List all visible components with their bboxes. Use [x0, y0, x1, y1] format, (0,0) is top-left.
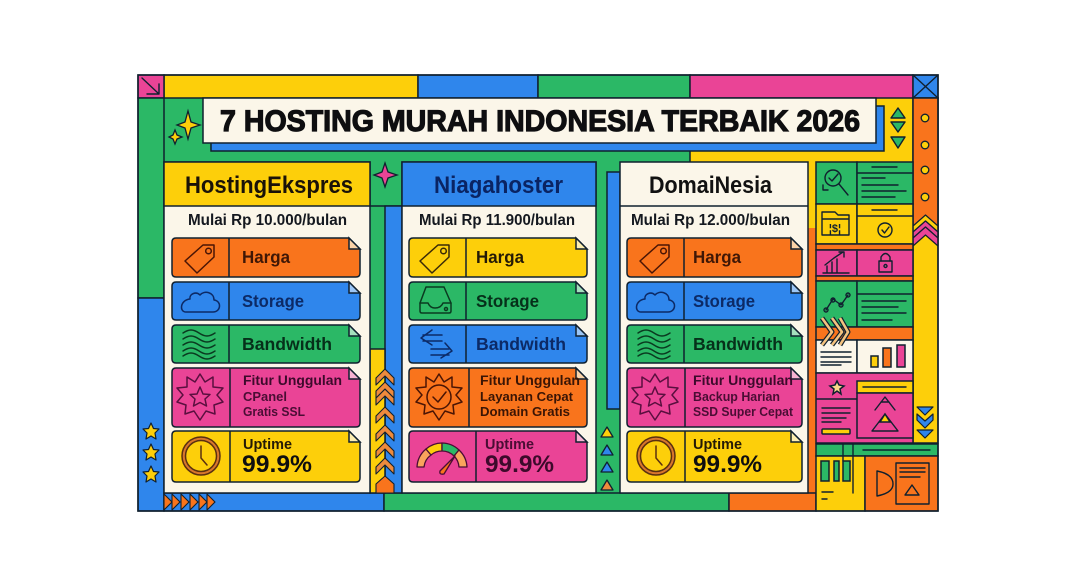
poster background — [138, 75, 938, 511]
icon: tag — [420, 245, 449, 273]
icon: waves — [183, 330, 215, 359]
row: Uptime: Uptime — [485, 437, 534, 453]
corner tile: blue cross — [913, 75, 938, 98]
row: Fitur Unggulan — [409, 368, 587, 427]
left border column — [138, 98, 164, 511]
tile row: chart and lock — [816, 250, 913, 276]
header: Niagahoster — [434, 172, 563, 199]
orange chevrons — [376, 369, 394, 493]
icon: check badge — [416, 374, 462, 420]
price: Mulai Rp 10.000/bulan — [188, 212, 347, 229]
strip with bars — [816, 444, 938, 456]
row: Harga: Harga — [693, 247, 741, 267]
tile row: line chart and text — [816, 281, 913, 327]
icon: transfer arrows — [421, 330, 452, 358]
row: Fitur Unggulan: Fitur Unggulan — [243, 372, 342, 388]
top border band — [164, 75, 913, 98]
row: Fitur Unggulan: Fitur Unggulan — [480, 372, 580, 388]
icon: star badge — [632, 374, 678, 420]
row: Bandwidth — [172, 325, 360, 363]
header: DomaiNesia — [649, 172, 773, 199]
gutter between columns 2 and 3 — [601, 172, 620, 490]
row: Uptime — [172, 431, 360, 482]
chevrons up — [913, 215, 938, 246]
arrows on bottom band — [164, 494, 215, 510]
tile row: search and text — [816, 162, 913, 204]
row: Fitur Unggulan: Domain Gratis — [480, 404, 570, 419]
row: Bandwidth: Bandwidth — [476, 334, 566, 354]
row: Uptime — [627, 431, 802, 482]
price: Mulai Rp 12.000/bulan — [631, 212, 790, 229]
row: Storage: Storage — [693, 291, 755, 311]
row: Fitur Unggulan: Gratis SSL — [243, 404, 305, 419]
row: Storage: Storage — [242, 291, 304, 311]
row: Uptime: 99.9% — [485, 451, 554, 478]
panel: HostingEkspres — [164, 162, 370, 493]
decorative tile panel — [816, 162, 938, 511]
gutter between columns 1 and 2 — [370, 206, 402, 493]
strip — [816, 276, 913, 281]
strip — [816, 244, 913, 250]
row: Harga: Harga — [242, 247, 290, 267]
row: Fitur Unggulan — [172, 368, 360, 427]
title banner — [203, 98, 884, 151]
row: Fitur Unggulan: Fitur Unggulan — [693, 372, 793, 388]
panel: Niagahoster — [402, 162, 596, 493]
chevrons overlapping tiles — [822, 318, 848, 345]
icon: cloud — [636, 292, 675, 312]
row: Fitur Unggulan: CPanel — [243, 389, 287, 404]
tile row: text and bars — [816, 340, 913, 373]
pink sparkle — [374, 163, 397, 187]
row: Fitur Unggulan: Layanan Cepat — [480, 389, 574, 404]
icon: tag — [185, 245, 214, 273]
right border column — [913, 98, 938, 443]
row: Fitur Unggulan: Backup Harian — [693, 389, 780, 404]
orange dots — [921, 114, 929, 201]
row: Storage: Storage — [476, 291, 539, 311]
row: Bandwidth: Bandwidth — [242, 334, 332, 354]
row: Uptime: 99.9% — [693, 451, 762, 478]
tile: yellow with bars — [816, 444, 865, 511]
row: Storage — [627, 282, 802, 320]
tile row: folder and check — [816, 204, 913, 244]
header — [402, 162, 596, 206]
row: Storage — [172, 282, 360, 320]
icon: tag — [640, 245, 669, 273]
row: Fitur Unggulan — [627, 368, 802, 427]
icon: cloud — [181, 292, 220, 312]
icon: small star — [830, 381, 844, 394]
bar chart — [871, 345, 905, 367]
row: Harga — [409, 238, 587, 277]
row: Harga — [172, 238, 360, 277]
row: Bandwidth: Bandwidth — [693, 334, 783, 354]
row: Harga: Harga — [476, 247, 524, 267]
price: Mulai Rp 11.900/bulan — [419, 212, 575, 229]
row: Fitur Unggulan: SSD Super Cepat — [693, 404, 794, 419]
triangles — [601, 427, 613, 490]
stars on left column — [143, 423, 159, 482]
icon: star badge — [177, 374, 223, 420]
tile block: pink — [816, 373, 913, 443]
row: Storage — [409, 282, 587, 320]
tile: orange with document — [865, 456, 938, 511]
icon: drive — [420, 287, 451, 313]
panel: DomaiNesia — [620, 162, 808, 493]
header — [164, 162, 370, 206]
row: Uptime: Uptime — [243, 437, 292, 453]
icon: gauge — [417, 443, 467, 474]
row: Uptime — [409, 431, 587, 482]
outer frame — [138, 75, 938, 511]
row: Uptime: Uptime — [693, 437, 742, 453]
icon: clock — [182, 437, 220, 475]
title: 7 HOSTING MURAH INDONESIA TERBAIK 2026 — [220, 105, 860, 138]
row: Harga — [627, 238, 802, 277]
icon: folder — [822, 212, 849, 235]
row: Uptime: 99.9% — [242, 451, 312, 478]
sparkles near title — [169, 111, 200, 144]
row: Bandwidth — [409, 325, 587, 363]
chevrons down — [917, 407, 933, 438]
icon: waves — [638, 330, 670, 359]
icon: magnifier — [823, 170, 848, 195]
tile row: folder and check: ¦$¦ — [829, 223, 841, 235]
triangles beside title — [891, 108, 905, 148]
header: HostingEkspres — [185, 172, 353, 199]
bottom border band — [164, 493, 816, 511]
row: Bandwidth — [627, 325, 802, 363]
strip — [816, 327, 913, 340]
corner tile: pink arrow — [138, 75, 164, 98]
icon: clock — [637, 437, 675, 475]
